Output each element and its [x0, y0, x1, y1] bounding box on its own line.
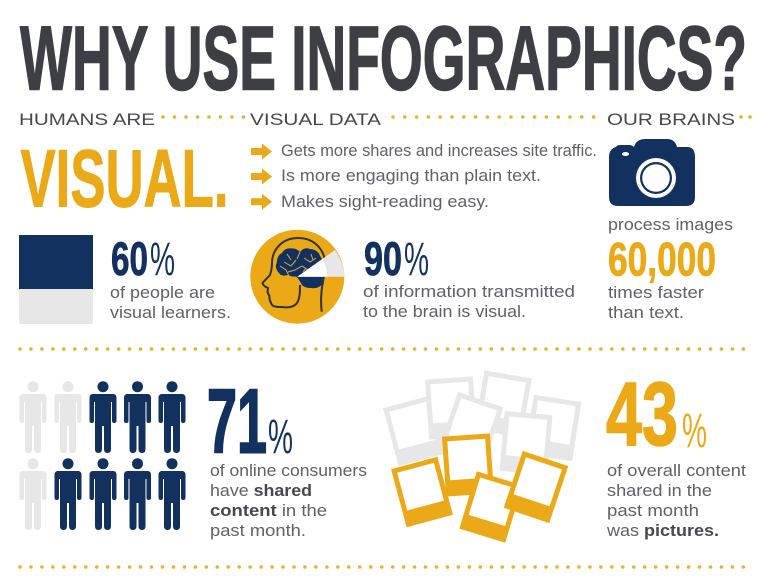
stat: 60%: 60: [111, 232, 148, 285]
heading: humans are: HUMANS ARE: [19, 110, 155, 129]
icon: arrow 2: [251, 168, 272, 184]
text: visual learners: of people are: [110, 283, 215, 302]
text: overall content: was pictures.: [606, 521, 719, 540]
icon: camera: [609, 139, 695, 206]
text: times faster: than text.: [608, 303, 684, 322]
list: visual data benefits: [251, 141, 597, 211]
text: visual learners: visual learners.: [110, 303, 231, 322]
illustration: scattered photos: [383, 370, 581, 543]
stat: 60%: %: [150, 232, 175, 285]
text: online consumers: have shared: [210, 481, 312, 500]
text: information transmitted: to the brain is visual.: [363, 302, 526, 321]
heading: our brains: OUR BRAINS: [607, 110, 735, 129]
text: overall content: past month: [607, 501, 699, 520]
text: online consumers: [210, 461, 367, 540]
text: overall content: of overall content: [607, 461, 746, 480]
icon: brain pie chart: [250, 230, 344, 324]
stat: 90%: %: [404, 232, 429, 285]
stat: 43%: 43: [606, 365, 678, 465]
text: visual learners: [110, 283, 231, 322]
bullet 1: Gets more shares and increases site traffic.: [281, 141, 597, 160]
bullet 2: Is more engaging than plain text.: [281, 166, 541, 185]
text: online consumers: content in the: [210, 501, 327, 520]
bullet 3: Makes sight-reading easy.: [281, 192, 489, 211]
pictogram: people 71 percent: [20, 381, 186, 530]
icon: arrow 3: [251, 194, 272, 210]
stat: 71%: %: [268, 411, 293, 464]
icon: arrow 1: [251, 144, 272, 160]
text: information transmitted: [363, 282, 575, 321]
text: information transmitted: of information transmitted: [363, 282, 575, 301]
text: online consumers: of online consumers: [210, 461, 367, 480]
stat: 43%: %: [682, 405, 707, 458]
stat: 71%: 71: [207, 371, 267, 472]
big word: visual: VISUAL.: [20, 134, 228, 224]
text: times faster: [608, 283, 704, 322]
text: overall content: shared in the: [607, 481, 712, 500]
text: process images: process images: [608, 215, 733, 234]
stat: 90%: 90: [364, 232, 402, 285]
chart: 60 percent square: [19, 235, 93, 324]
text: online consumers: past month.: [210, 521, 306, 540]
text: overall content: [606, 461, 746, 540]
stat: 60,000: 60,000: [608, 232, 716, 286]
text: times faster: times faster: [608, 283, 704, 302]
heading: visual data: VISUAL DATA: [250, 110, 382, 129]
